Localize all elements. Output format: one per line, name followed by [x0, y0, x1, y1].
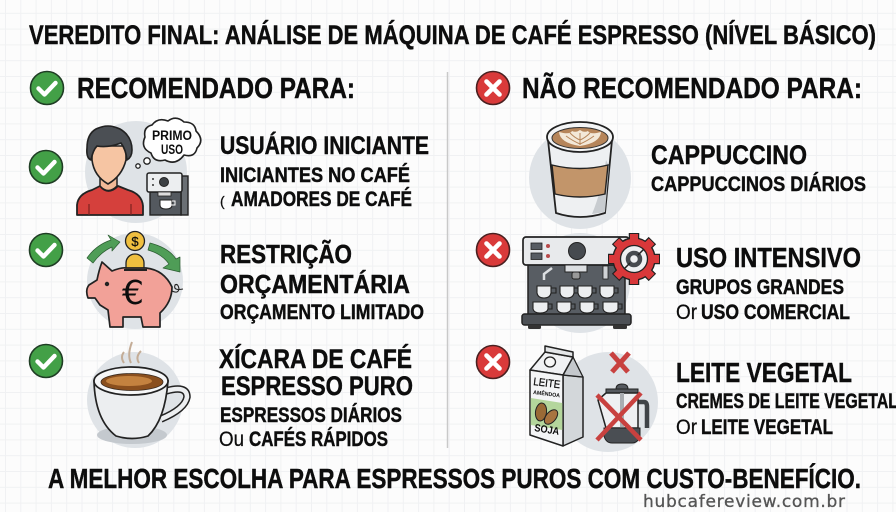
- icon: milk carton and french press: LEITE: [533, 376, 561, 391]
- text block: usuário iniciante: INICIANTES NO CAFÉ: [220, 162, 410, 187]
- icon: euro sign: €: [122, 273, 144, 312]
- icon: check orçamento: [30, 234, 62, 266]
- text block: uso intensivo: GRUPOS GRANDES: [676, 275, 844, 299]
- icon: milk carton and french press: SOJA: [534, 422, 560, 438]
- text block: xícara de café: Ou: [219, 427, 244, 451]
- text block: uso intensivo: [676, 242, 861, 324]
- text block: restrição orçamentária: RESTRIÇÃO: [220, 239, 352, 269]
- icon: beginner and machine: USO: [161, 142, 183, 157]
- panel: não recomendado: [476, 71, 896, 452]
- text block: leite vegetal: Or: [676, 415, 697, 439]
- icon: beginner and machine: [77, 118, 201, 223]
- icon: milk carton and french press: AMÊNDOA: [533, 388, 561, 399]
- text block: xícara de café: ESPRESSOS DIÁRIOS: [220, 402, 402, 427]
- website watermark: hubcafereview.com.br: [643, 492, 845, 512]
- text block: uso intensivo: USO COMERCIAL: [701, 300, 850, 324]
- text block: leite vegetal: [676, 357, 896, 439]
- text block: cappuccino: [651, 140, 866, 196]
- icon: espresso cup: [87, 342, 187, 448]
- text block: usuário iniciante: [220, 131, 429, 211]
- icon: check usuário: [30, 150, 62, 184]
- heading: recomendado para: RECOMENDADO PARA:: [77, 73, 355, 105]
- text block: usuário iniciante: AMADORES DE CAFÉ: [231, 186, 412, 211]
- text block: xícara de café: [219, 344, 413, 451]
- text block: restrição orçamentária: ORÇAMENTO LIMITADO: [220, 300, 424, 324]
- text block: uso intensivo: Or: [676, 300, 697, 324]
- text block: usuário iniciante: USUÁRIO INICIANTE: [220, 131, 429, 160]
- text block: usuário iniciante: (: [220, 193, 225, 209]
- text block: uso intensivo: USO INTENSIVO: [676, 242, 861, 273]
- icon: piggy bank: [87, 232, 183, 329]
- icon: cross uso intensivo: [476, 234, 510, 266]
- icon: check xícara: [30, 344, 62, 378]
- text block: cappuccino: CAPPUCCINO: [651, 140, 807, 170]
- icon: piggy bank: $: [131, 234, 139, 249]
- icon: cross leite vegetal: [476, 346, 510, 378]
- icon: milk carton and french press: [530, 346, 658, 452]
- icon: header cross: [476, 72, 510, 104]
- text block: restrição orçamentária: ORÇAMENTÁRIA: [220, 269, 410, 299]
- text block: leite vegetal: LEITE VEGETAL: [676, 357, 852, 388]
- text block: xícara de café: XÍCARA DE CAFÉ: [219, 344, 412, 374]
- text block: restrição orçamentária: [220, 239, 424, 324]
- icon: beginner and machine: PRIMO: [152, 128, 192, 143]
- icon: cappuccino cup: [529, 122, 631, 229]
- text block: leite vegetal: LEITE VEGETAL: [701, 415, 833, 439]
- text block: xícara de café: CAFÉS RÁPIDOS: [249, 426, 388, 451]
- icon: header check: [30, 72, 64, 104]
- text block: xícara de café: ESPRESSO PURO: [221, 371, 413, 401]
- icon: commercial machine with gear: [522, 233, 660, 333]
- panel: recomendado: [30, 72, 429, 451]
